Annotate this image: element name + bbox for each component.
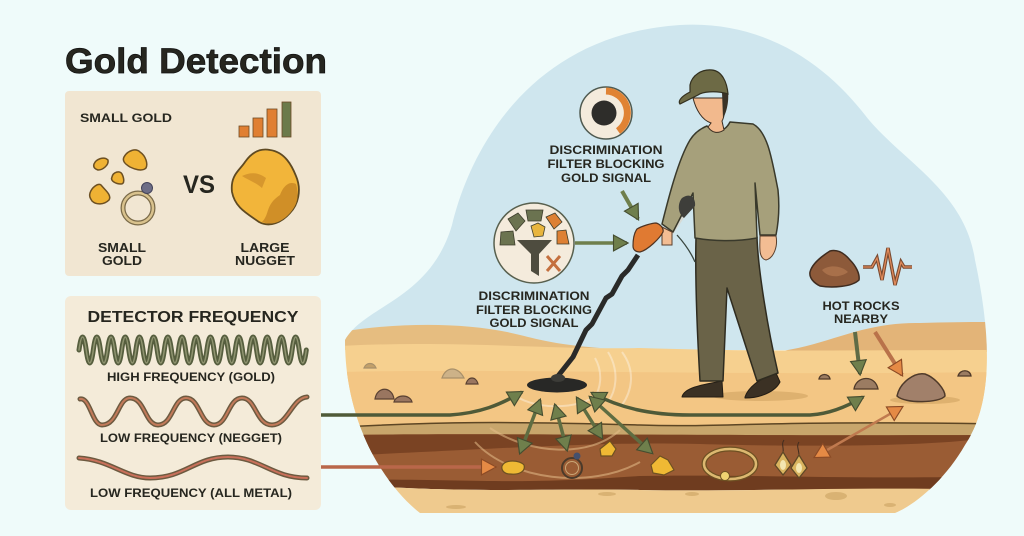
neck and face <box>693 98 725 132</box>
arm brace <box>665 205 690 243</box>
label: discrimination upper: GOLD SIGNAL <box>561 171 651 185</box>
arrow: coil to small rock <box>592 393 863 415</box>
label: low frequency nugget: LOW FREQUENCY (NEGGET) <box>100 431 282 445</box>
sub-surface strip <box>340 423 1000 437</box>
label: hot rocks nearby: HOT ROCKS <box>822 299 900 313</box>
arrows: coil to targets <box>520 397 652 453</box>
arrow: hot rocks to small rock <box>855 332 860 374</box>
arrow: low frequency to buried gold <box>321 465 495 469</box>
arrow: dial to control box <box>622 191 638 219</box>
cap <box>679 70 728 104</box>
label: large: LARGE <box>240 240 290 255</box>
hair <box>722 92 728 118</box>
label: high frequency: HIGH FREQUENCY (GOLD) <box>107 370 275 384</box>
surface rocks <box>364 364 478 402</box>
rock shadow <box>890 396 960 404</box>
label: discrimination lower: GOLD SIGNAL <box>490 316 578 330</box>
label: low frequency all metal: LOW FREQUENCY (ALL METAL) <box>90 486 292 500</box>
chart: low frequency all metal wave <box>79 457 307 478</box>
icon: ring with gem <box>123 182 153 223</box>
icon: hot rock <box>810 251 859 287</box>
scene rocks and hot rocks <box>810 248 971 402</box>
shirt <box>662 122 779 241</box>
panel: detector frequency <box>65 296 321 510</box>
panel: small gold vs large nugget <box>65 91 321 276</box>
icon: buried nuggets <box>502 441 674 475</box>
arrow: filter to control box <box>575 241 627 245</box>
vs label: VS <box>183 171 215 199</box>
detector cable <box>677 235 695 262</box>
panel: field scene <box>340 20 1000 520</box>
title: Gold Detection <box>65 42 327 81</box>
back dunes <box>340 325 600 350</box>
label: discrimination upper <box>548 143 664 185</box>
buried gold and jewellery <box>502 440 807 480</box>
arrow: hot rocks to large rock <box>875 332 902 375</box>
figure shadow <box>712 391 808 401</box>
chart: high frequency wave <box>79 337 306 363</box>
shoes <box>682 373 780 398</box>
arrow: high frequency to coil <box>321 392 522 415</box>
icon: signal bars <box>239 102 291 137</box>
label: discrimination lower: DISCRIMINATION <box>478 289 590 303</box>
surface ripples <box>510 352 631 406</box>
hands <box>662 227 777 260</box>
label: small gold: SMALL <box>98 240 146 255</box>
label: nearby: NEARBY <box>834 312 888 326</box>
label: gold: GOLD <box>102 253 142 268</box>
control box <box>633 223 663 252</box>
sand surface <box>340 344 1000 430</box>
label: discrimination upper: DISCRIMINATION <box>550 143 662 157</box>
heading: small gold: SMALL GOLD <box>80 111 172 125</box>
person with detector <box>527 70 780 398</box>
icon: buried small rocks <box>819 371 971 389</box>
label: discrimination lower <box>476 289 592 330</box>
icon: large rock <box>897 374 945 402</box>
detector shaft <box>558 255 638 376</box>
heading: detector frequency: DETECTOR FREQUENCY <box>88 309 299 326</box>
label: discrimination lower: FILTER BLOCKING <box>476 303 592 317</box>
sky <box>340 20 1000 350</box>
icon: bracelet <box>704 449 756 480</box>
trousers <box>696 237 778 381</box>
chart: low frequency nugget wave <box>80 397 307 425</box>
arrow: large rock to earrings <box>815 407 902 457</box>
icon: dial <box>580 87 632 139</box>
underground signal arcs <box>475 428 640 478</box>
detector coil <box>527 374 587 392</box>
icon: filter dial <box>494 203 574 283</box>
icon: hot rock signal <box>863 248 912 285</box>
soil layer <box>363 434 971 488</box>
label: discrimination upper: FILTER BLOCKING <box>548 157 664 171</box>
arm cuff <box>679 196 695 218</box>
label: nugget: NUGGET <box>235 253 295 268</box>
icon: large nugget <box>232 150 299 224</box>
bottom sand <box>394 488 930 513</box>
icon: buried ring <box>562 452 582 478</box>
icon: small gold nuggets <box>90 150 147 204</box>
icon: earrings <box>775 440 807 478</box>
